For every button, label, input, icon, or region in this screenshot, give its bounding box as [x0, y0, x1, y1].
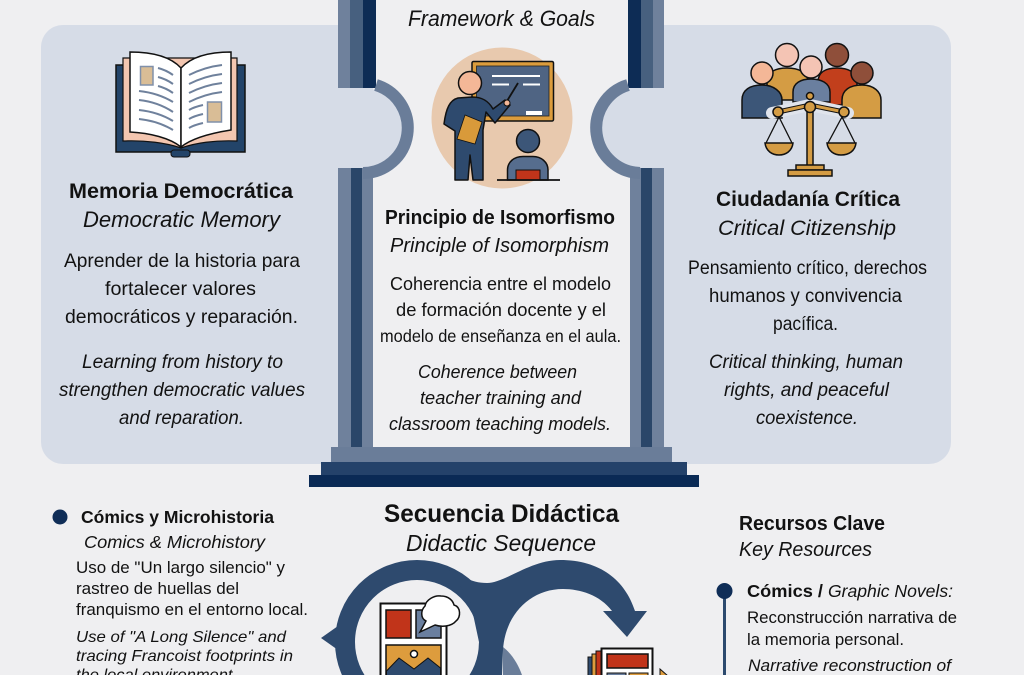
diagram: cycle arrows — [321, 560, 647, 675]
text block: Critical Citizenship: coexistence. — [756, 408, 858, 429]
heading: Didactic Sequence — [384, 500, 620, 556]
text block: Critical Citizenship: pacífica. — [773, 314, 838, 335]
text block: Principle of Isomorphism: Principio de Isomorfismo — [385, 207, 615, 229]
text block: Principle of Isomorphism: Coherencia entre el modelo — [390, 274, 611, 294]
heading: Didactic Sequence: Secuencia Didáctica — [384, 500, 620, 528]
text block: Principle of Isomorphism: Principle of Isomorphism — [390, 235, 609, 257]
text block: Democratic Memory: Learning from history to — [82, 351, 283, 373]
text block: Principle of Isomorphism: teacher training and — [420, 388, 582, 408]
text block: Critical Citizenship: Critical Citizenship — [718, 217, 896, 240]
panel: central column — [330, 0, 670, 447]
icon: stacked comics — [588, 648, 668, 675]
icon: citizens and scales — [742, 44, 881, 176]
text block: Comics and Microhistory: Cómics y Microhistoria — [81, 507, 274, 527]
text block: Comics and Microhistory: Uso de "Un largo silencio" y — [76, 559, 286, 577]
icon: comic page — [380, 596, 460, 675]
column base steps — [309, 447, 699, 487]
panel: left Democratic Memory — [41, 25, 381, 464]
text block: Comics and Microhistory — [52, 507, 308, 675]
text block: Key Resources: Reconstrucción narrativa de — [747, 609, 957, 627]
text block: Democratic Memory — [59, 180, 305, 429]
text block: Comics and Microhistory: tracing Francoist footprints in — [76, 648, 293, 665]
text block: Key Resources — [716, 513, 957, 675]
text block: Key Resources: Recursos Clave — [739, 513, 885, 535]
text block: Principle of Isomorphism: classroom teaching models. — [389, 414, 611, 434]
text block: Key Resources: Graphic Novels: — [828, 581, 953, 601]
heading: Didactic Sequence: Didactic Sequence — [406, 530, 596, 556]
heading: framework and goals: Framework & Goals — [408, 6, 595, 31]
icon: teacher and student — [432, 48, 572, 188]
text block: Democratic Memory: democráticos y reparación. — [65, 306, 298, 328]
text block: Key Resources: Key Resources — [739, 539, 872, 561]
panel: right Critical Citizenship — [620, 25, 951, 464]
text block: Principle of Isomorphism: modelo de enseñanza en el aula. — [380, 326, 621, 346]
text block: Critical Citizenship: Pensamiento crítico, derechos — [688, 258, 927, 279]
text block: Comics and Microhistory: Use of "A Long Silence" and — [76, 629, 287, 646]
text block: Comics and Microhistory: franquismo en el entorno local. — [76, 601, 308, 619]
text block: Critical Citizenship: rights, and peaceful — [724, 380, 890, 401]
text block: Principle of Isomorphism: de formación docente y el — [396, 300, 606, 320]
text block: Democratic Memory: Democratic Memory — [83, 207, 282, 232]
text block: Critical Citizenship: Critical thinking, human — [709, 352, 903, 373]
icon: open book — [116, 52, 245, 157]
text block: Democratic Memory: fortalecer valores — [105, 278, 256, 300]
text block: Comics and Microhistory: rastreo de huellas del — [76, 580, 239, 598]
text block: Critical Citizenship — [688, 188, 927, 429]
text block: Principle of Isomorphism — [380, 207, 621, 434]
text block: Critical Citizenship: humanos y convivencia — [709, 286, 902, 307]
text block: Democratic Memory: strengthen democratic values — [59, 379, 305, 401]
text block: Democratic Memory: Memoria Democrática — [69, 180, 293, 203]
text block: Comics and Microhistory: Comics & Microhistory — [84, 532, 266, 552]
text block: Principle of Isomorphism: Coherence between — [418, 362, 577, 382]
text block: Key Resources: Cómics / — [747, 581, 823, 601]
text block: Key Resources: la memoria personal. — [747, 631, 904, 649]
text block: Critical Citizenship: Ciudadanía Crítica — [716, 188, 900, 211]
text block: Democratic Memory: and reparation. — [119, 407, 244, 429]
text block: Key Resources: Narrative reconstruction of — [748, 657, 954, 675]
text block: Democratic Memory: Aprender de la historia para — [64, 250, 300, 272]
